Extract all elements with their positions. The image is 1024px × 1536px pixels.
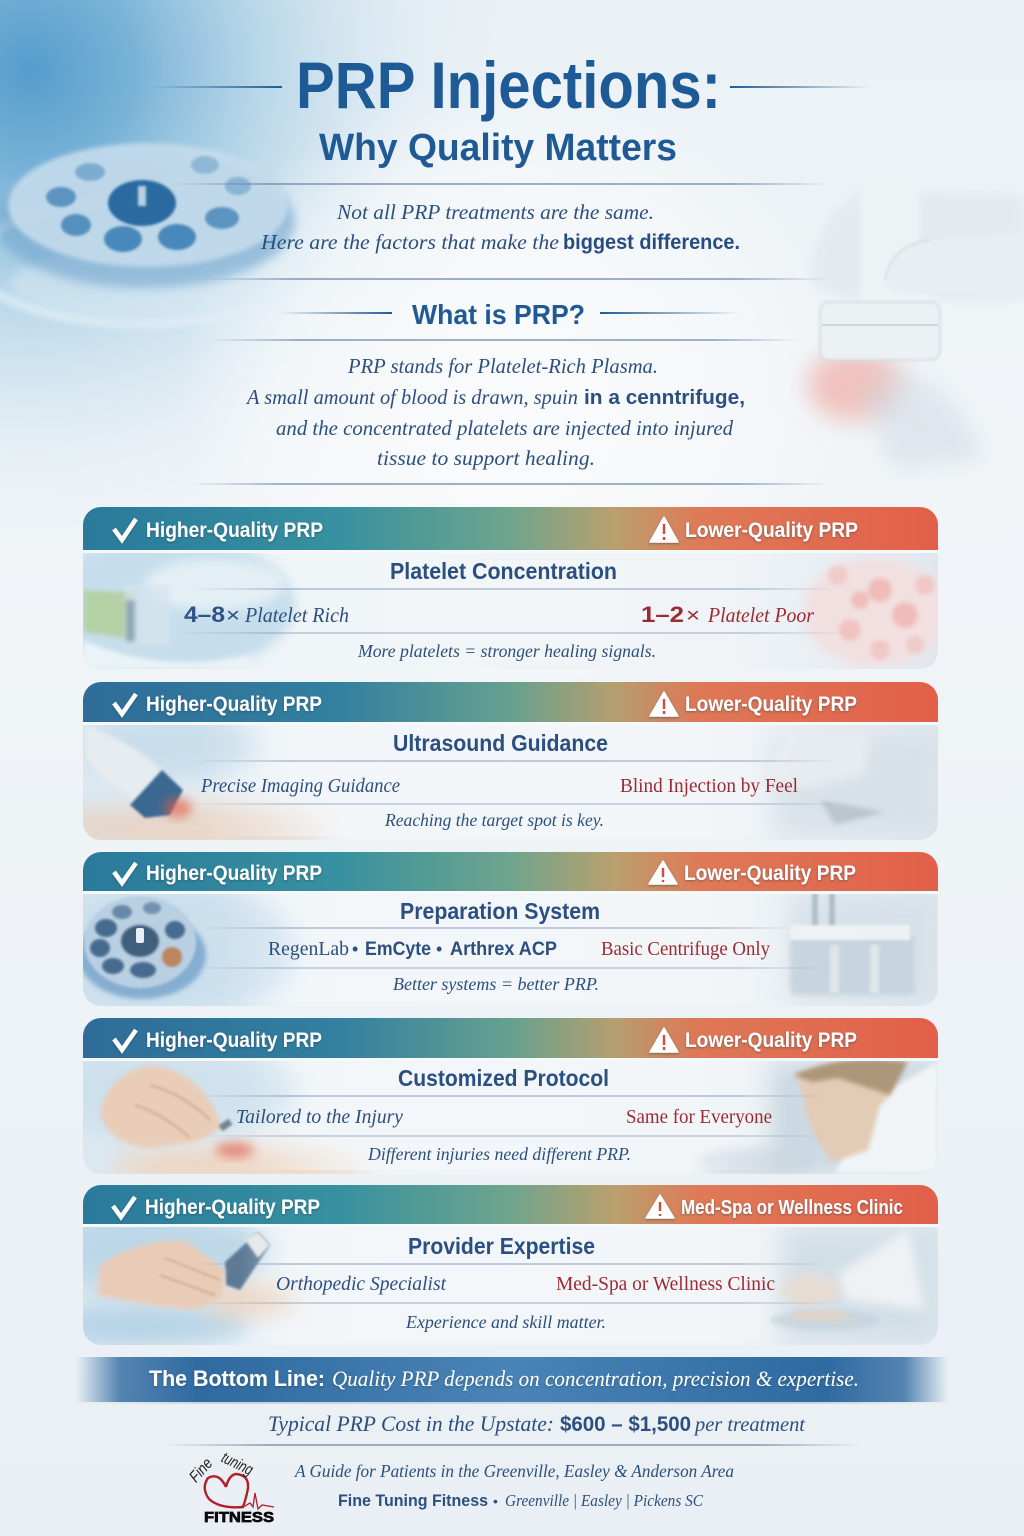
header bar: Higher-Quality PRP xyxy=(146,1029,322,1052)
panel text xyxy=(170,558,850,661)
image: tube rack xyxy=(83,553,299,668)
cost line xyxy=(268,1411,805,1436)
panel text xyxy=(216,902,802,994)
cost line: $600 – $1,500 xyxy=(560,1413,691,1436)
panel text: Arthrex ACP xyxy=(450,939,557,960)
header bar: Lower-Quality PRP xyxy=(685,1029,857,1052)
panel text: Basic Centrifuge Only xyxy=(601,938,770,960)
panel text: EmCyte xyxy=(365,939,431,960)
title: PRP Injections: xyxy=(296,48,721,122)
logo: Fine Tuning Fitness xyxy=(186,1449,274,1526)
bottom line banner xyxy=(76,1357,948,1404)
intro text xyxy=(260,200,740,254)
footer text: Fine Tuning Fitness xyxy=(338,1491,488,1510)
panel text: Platelet Rich xyxy=(244,603,349,627)
panel text: Med-Spa or Wellness Clinic xyxy=(556,1273,775,1295)
footer text: • xyxy=(493,1493,498,1509)
panel text: Orthopedic Specialist xyxy=(276,1273,446,1295)
panel: preparation system xyxy=(83,852,938,1006)
header bar: Lower-Quality PRP xyxy=(685,693,857,716)
bottom line banner: The Bottom Line: xyxy=(149,1366,325,1391)
PRP description: tissue to support healing. xyxy=(377,446,595,470)
image: blood cells xyxy=(803,557,947,667)
panel text: RegenLab xyxy=(268,938,349,960)
header bar xyxy=(83,682,938,725)
bottom line banner: Quality PRP depends on concentration, precision & expertise. xyxy=(332,1366,859,1391)
panel: ultrasound guidance xyxy=(83,682,938,840)
image: probe on skin xyxy=(83,725,331,840)
image: specialist hand with probe xyxy=(83,1227,302,1345)
intro text: Here are the factors that make the xyxy=(260,230,559,254)
header bar: Lower-Quality PRP xyxy=(684,862,856,885)
panel text: More platelets = stronger healing signals. xyxy=(357,641,656,661)
header bar xyxy=(83,507,938,553)
panel text xyxy=(190,730,850,830)
image: centrifuge xyxy=(0,143,305,324)
heading: What is PRP: What is PRP? xyxy=(412,299,585,330)
intro text: Not all PRP treatments are the same. xyxy=(336,200,654,224)
panel text: Platelet Poor xyxy=(707,603,815,627)
panel text: 1–2 xyxy=(641,602,684,627)
panel text: Tailored to the Injury xyxy=(236,1106,403,1128)
intro text: biggest difference. xyxy=(563,231,740,254)
image: basic centrifuge machine xyxy=(790,893,940,1000)
image: clinic worker with tablet xyxy=(770,1228,940,1343)
panel: platelet concentration xyxy=(45,507,947,673)
image: hand injecting xyxy=(83,1061,372,1174)
panel: customized protocol xyxy=(83,1018,938,1174)
panel text: Blind Injection by Feel xyxy=(620,775,798,797)
PRP description: A small amount of blood is drawn, spuin xyxy=(245,385,578,409)
cost line: Typical PRP Cost in the Upstate: xyxy=(268,1411,554,1436)
panel text xyxy=(190,1233,840,1332)
logo: Fine Tuning Fitness: Fine xyxy=(186,1455,216,1486)
image: clinician in white coat xyxy=(695,1059,940,1176)
PRP description xyxy=(245,354,745,470)
panel text: Platelet Concentration xyxy=(390,558,617,584)
panel text: × xyxy=(686,605,700,627)
footer text: A Guide for Patients in the Greenville, Easley & Anderson Area xyxy=(294,1461,734,1481)
header bar xyxy=(83,1018,938,1061)
panel text: • xyxy=(352,939,358,959)
image: ultrasound probe on skin xyxy=(807,185,1024,470)
cost line: per treatment xyxy=(693,1414,805,1436)
subtitle: Why Quality Matters xyxy=(319,127,677,169)
panel text xyxy=(190,1065,830,1164)
logo: Fine Tuning Fitness: tuning xyxy=(218,1449,256,1479)
panel text: Same for Everyone xyxy=(626,1106,772,1128)
PRP description: and the concentrated platelets are injected into injured xyxy=(276,416,733,440)
panel text: Customized Protocol xyxy=(398,1065,609,1091)
header bar: Higher-Quality PRP xyxy=(146,693,322,716)
image: gloved hands with needle xyxy=(770,739,925,837)
PRP description: PRP stands for Platelet-Rich Plasma. xyxy=(347,354,658,378)
header bar: Lower-Quality PRP xyxy=(685,519,858,542)
panel text: × xyxy=(226,605,240,627)
header bar: Higher-Quality PRP xyxy=(145,1196,320,1219)
footer text xyxy=(294,1461,734,1510)
panel text: • xyxy=(436,939,442,959)
header bar: Higher-Quality PRP xyxy=(146,519,323,542)
panel text: Experience and skill matter. xyxy=(405,1312,606,1332)
panel text: Ultrasound Guidance xyxy=(393,730,608,756)
panel text: Different injuries need different PRP. xyxy=(367,1144,631,1164)
panel: provider expertise xyxy=(30,1185,940,1345)
panel text: Provider Expertise xyxy=(408,1233,595,1259)
logo: Fine Tuning Fitness: FITNESS xyxy=(204,1509,274,1526)
header bar: Med-Spa or Wellness Clinic xyxy=(681,1197,903,1219)
footer text: Greenville | Easley | Pickens SC xyxy=(505,1491,704,1510)
image: centrifuge rotor xyxy=(83,894,300,1006)
panel text: Reaching the target spot is key. xyxy=(384,810,604,830)
PRP description: in a cenntrifuge, xyxy=(584,387,745,409)
header bar xyxy=(83,1185,938,1227)
panel text: Precise Imaging Guidance xyxy=(200,775,400,797)
header bar xyxy=(83,852,938,894)
panel text: Better systems = better PRP. xyxy=(393,974,599,994)
panel text: 4–8 xyxy=(184,602,225,627)
panel text: Preparation System xyxy=(400,898,600,924)
header bar: Higher-Quality PRP xyxy=(146,862,322,885)
